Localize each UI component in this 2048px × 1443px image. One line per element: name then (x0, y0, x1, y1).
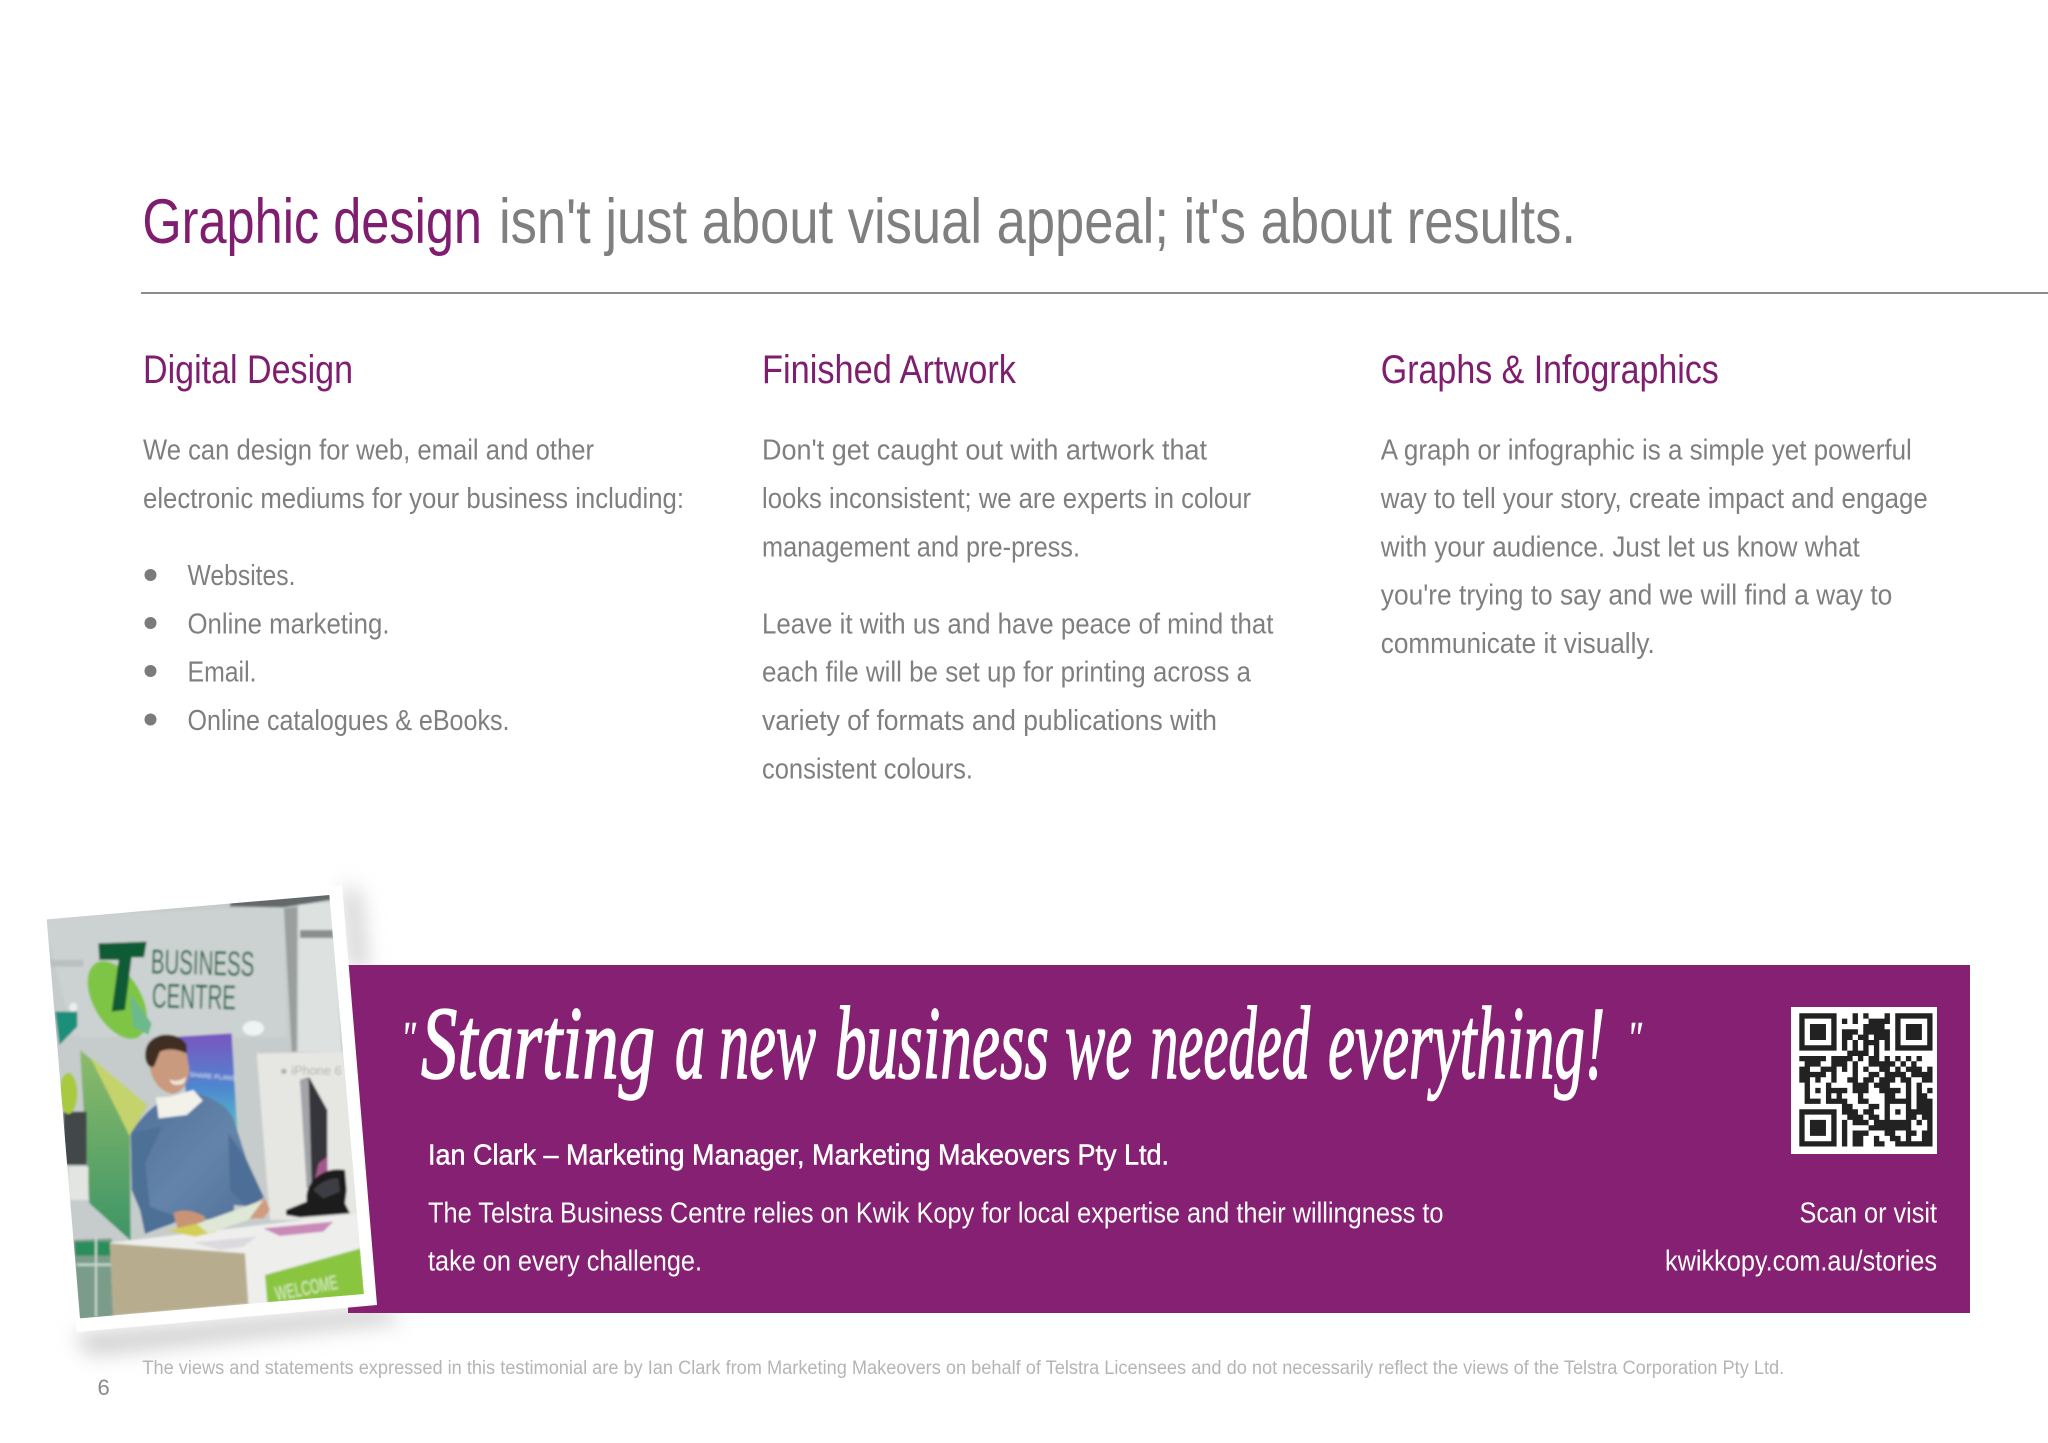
photo: man at Telstra Business Centre desk: ● iPhone 6 (280, 1064, 342, 1078)
panel: testimonial banner (348, 965, 1970, 1313)
heading: finished artwork: Finished Artwork (762, 348, 1017, 392)
text block: graphs and infographics paragraph (1380, 435, 1928, 660)
papers (167, 1223, 217, 1237)
testimonial text: take on every challenge. (428, 1246, 702, 1278)
text block: finished artwork paragraph one: management and pre-press. (762, 531, 1080, 563)
quote: new (719, 986, 816, 1101)
photo: man at Telstra Business Centre desk: WELCOME (273, 1272, 340, 1306)
quote: we (1065, 986, 1132, 1101)
panel: digital design (143, 348, 684, 737)
quote: " (401, 1013, 417, 1063)
text block: finished artwork paragraph one: Don't get caught out with artwork that (762, 435, 1207, 467)
title: Graphic design (142, 187, 482, 257)
quote: everything! (1328, 986, 1605, 1101)
text block: digital design intro (143, 435, 684, 515)
text block: graphs and infographics paragraph: you're trying to say and we will find a way to (1381, 580, 1892, 612)
T logo (98, 942, 147, 1012)
scan or visit text (1665, 1198, 1937, 1278)
panel: finished artwork (762, 348, 1274, 785)
BUSINESS sign text: CENTRE (151, 977, 236, 1018)
bullet list (144, 560, 510, 737)
quote: " (1627, 1013, 1643, 1063)
text block: digital design intro: electronic mediums for your business including: (143, 483, 684, 515)
text block: finished artwork paragraph one (762, 435, 1251, 563)
BUSINESS sign text: BUSINESS (150, 943, 255, 984)
text block: graphs and infographics paragraph: way to tell your story, create impact and engage (1380, 483, 1928, 515)
man (131, 1094, 264, 1234)
text block: finished artwork paragraph one: looks inconsistent; we are experts in colour (762, 483, 1251, 515)
attribution: Ian Clark – Marketing Manager, Marketing Makeovers Pty Ltd. (428, 1140, 1169, 1172)
testimonial text (428, 1198, 1444, 1278)
text block: graphs and infographics paragraph: communicate it visually. (1381, 628, 1655, 660)
quote: needed (1150, 986, 1311, 1101)
title (142, 187, 1576, 257)
heading: digital design: Digital Design (143, 348, 353, 392)
left green graphics (55, 1012, 77, 1045)
text block: finished artwork paragraph two: variety of formats and publications with (762, 705, 1217, 737)
scan or visit text: Scan or visit (1800, 1198, 1937, 1230)
panel: graphs and infographics (1380, 348, 1928, 660)
iPhone panel (257, 1052, 360, 1220)
bullet list: Online catalogues & eBooks. (188, 705, 510, 737)
text block: finished artwork paragraph two (762, 608, 1274, 785)
quote (401, 986, 1643, 1101)
page number: 6 (98, 1375, 110, 1400)
text block: graphs and infographics paragraph: A graph or infographic is a simple yet powerful (1381, 435, 1912, 467)
icon: qr code (1791, 1007, 1937, 1154)
text block: finished artwork paragraph two: each file will be set up for printing across a (762, 657, 1252, 689)
telephone (286, 1169, 350, 1217)
quote: a (675, 986, 705, 1101)
bullet list: Websites. (188, 560, 296, 592)
poster (178, 1033, 237, 1130)
heading: graphs and infographics: Graphs & Infographics (1381, 348, 1719, 392)
title: isn't just about visual appeal; it's about results. (499, 187, 1576, 257)
text block: digital design intro: We can design for web, email and other (143, 435, 594, 467)
text block: finished artwork paragraph two: consistent colours. (762, 753, 973, 785)
photo: man at Telstra Business Centre desk (38, 885, 377, 1332)
quote: Starting (421, 986, 655, 1101)
bullet list: Email. (188, 657, 256, 689)
disclaimer: The views and statements expressed in this testimonial are by Ian Clark from Marketing Makeovers on behalf of Telstra Licensees and do not necessarily reflect the views of the Telstra Corporation Pty Ltd. (142, 1358, 1784, 1379)
bullet list: Online marketing. (188, 608, 390, 640)
desk (110, 1213, 364, 1317)
text block: graphs and infographics paragraph: with your audience. Just let us know what (1380, 531, 1860, 563)
poster text: SHARE PLANS (189, 1072, 237, 1083)
text block: finished artwork paragraph two: Leave it with us and have peace of mind that (762, 608, 1274, 640)
quote: business (835, 986, 1049, 1101)
lime ball (86, 960, 148, 1040)
BUSINESS sign text (151, 948, 254, 1011)
testimonial text: The Telstra Business Centre relies on Kwik Kopy for local expertise and their willingness to (428, 1198, 1444, 1230)
scan or visit text: kwikkopy.com.au/stories (1665, 1246, 1937, 1278)
